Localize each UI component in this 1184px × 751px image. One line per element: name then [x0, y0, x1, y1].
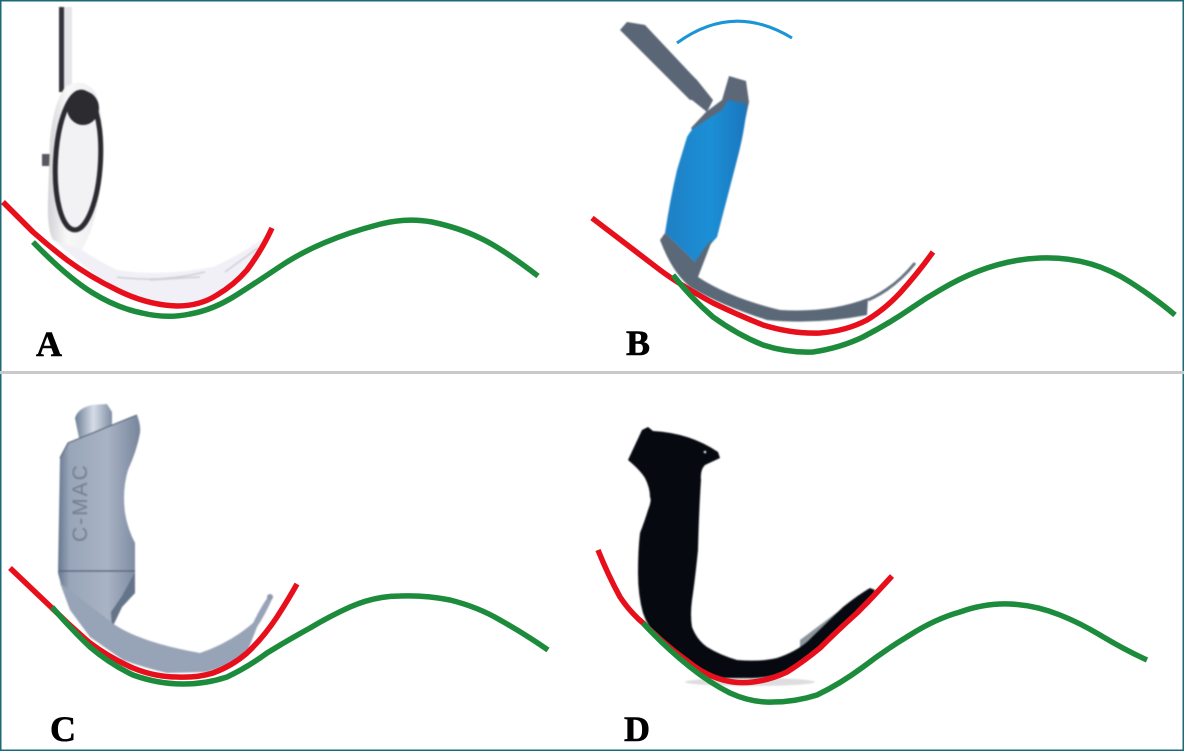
device C: steel C-MAC blade [58, 404, 273, 673]
device A: white handle and clear blade [42, 7, 264, 302]
panel A [3, 7, 538, 364]
device B: blue handle and grey blade [620, 22, 915, 322]
red curve A [3, 202, 272, 306]
label D: D [624, 709, 650, 749]
arrow: blue rotation arc [677, 21, 792, 43]
green curve C [52, 596, 548, 684]
handle lettering: C-MAC [69, 463, 92, 542]
label A: A [36, 324, 62, 364]
green curve B [673, 258, 1175, 352]
green curve A [33, 220, 538, 316]
label C: C [50, 709, 76, 749]
label B: B [626, 323, 650, 363]
green curve D [643, 604, 1147, 702]
device D: black hyperangulated blade [628, 427, 875, 686]
red curve D [598, 550, 892, 683]
red curve C [10, 568, 297, 677]
panel B [592, 21, 1175, 363]
panel D [598, 427, 1147, 749]
red curve B [592, 218, 933, 333]
panel C [10, 404, 548, 749]
